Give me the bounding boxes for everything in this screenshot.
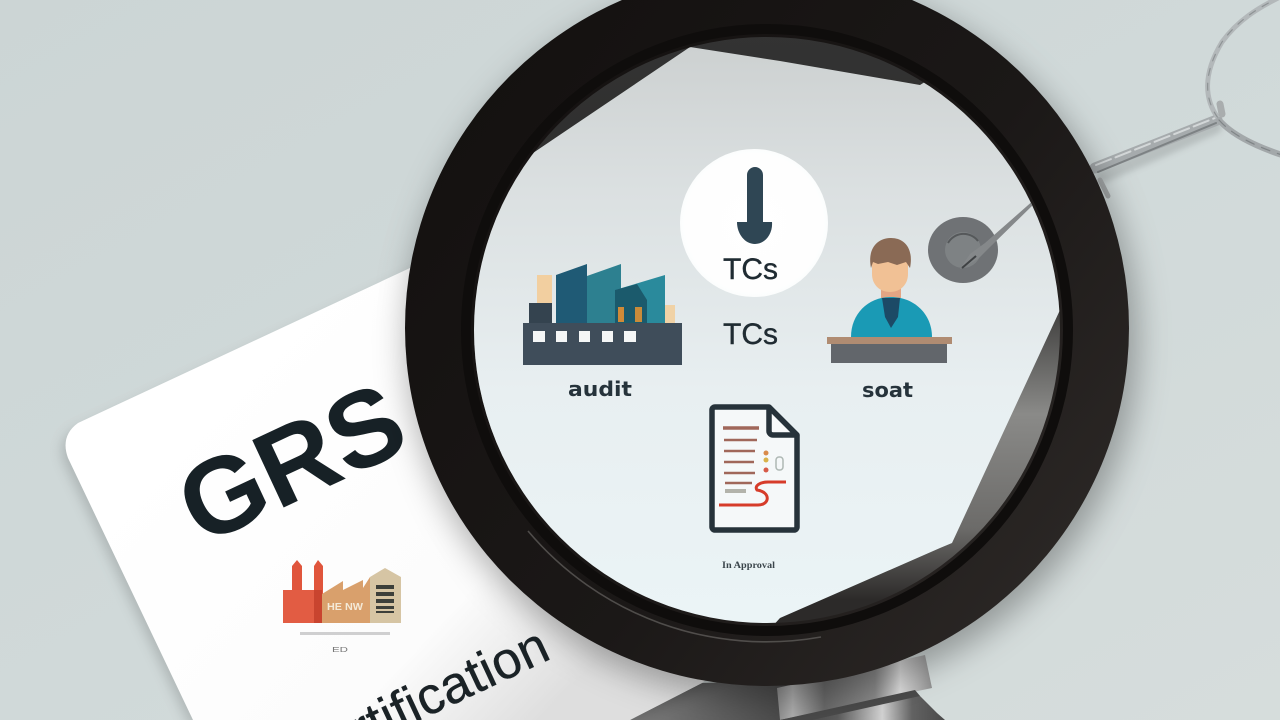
icon: person at desk: [827, 238, 952, 363]
icon: document: [712, 407, 797, 530]
icon: small factory: [283, 560, 401, 635]
panel: lens view: [474, 37, 1060, 623]
label: audit: audit: [568, 377, 632, 401]
label: soat: soat: [862, 378, 913, 402]
label: TCs middle: TCs: [723, 318, 778, 351]
white highlight circle: [680, 149, 828, 297]
icon: grey washer with pin: [928, 199, 1036, 283]
label: document caption: In Approval: [722, 560, 776, 570]
magnifying glass ring: [405, 0, 1129, 686]
handle shadow area below the card: [630, 680, 790, 720]
icon: down arrow: [737, 167, 772, 244]
label: TCs top: TCs: [723, 253, 778, 286]
magnifier shadow: [406, 0, 1138, 700]
card heading: GRS: GRS: [160, 358, 423, 567]
magnifier handle: [777, 655, 945, 720]
icon: factory: [523, 264, 682, 365]
metal wire loop: [1095, 0, 1280, 196]
panel: GRS certification card: [62, 254, 800, 720]
card small code: ED: [332, 647, 348, 654]
icon: small factory: HE NW: [327, 602, 364, 613]
